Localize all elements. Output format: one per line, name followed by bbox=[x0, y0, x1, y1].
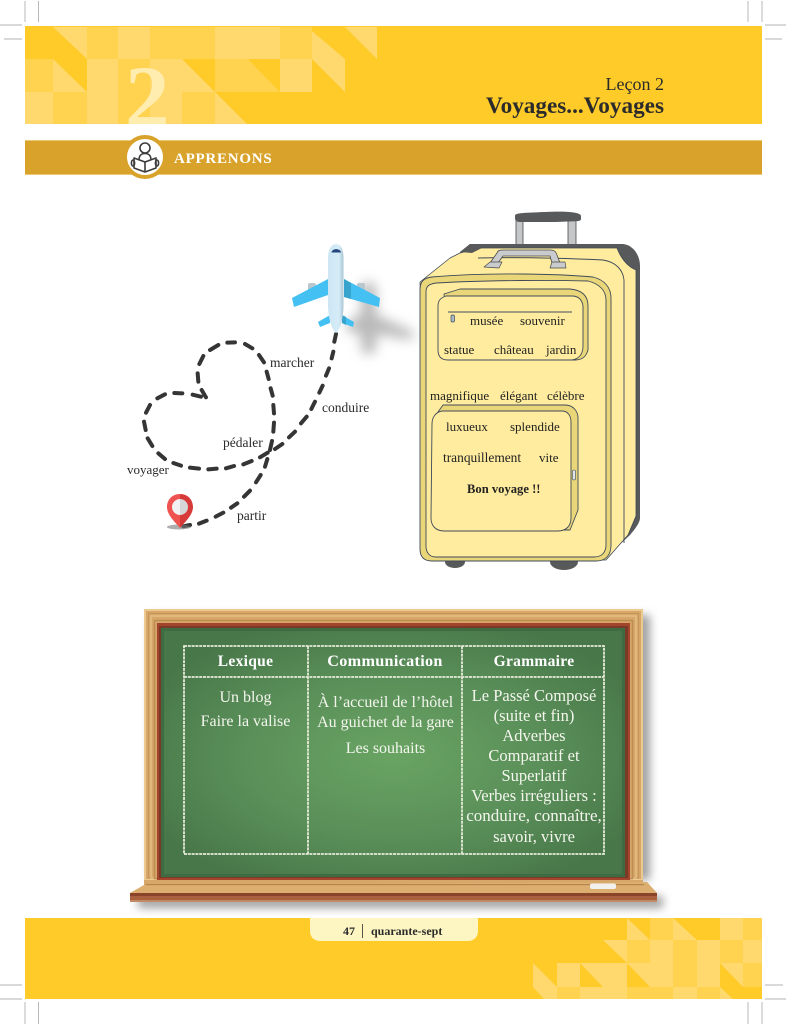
airplane shadow bbox=[347, 282, 414, 354]
suitcase upper pocket bbox=[438, 289, 588, 360]
suitcase words: élégant bbox=[500, 388, 538, 403]
grammaire column: conduire, connaître, bbox=[466, 806, 602, 825]
chalk table bbox=[184, 646, 604, 854]
red inner frame bbox=[157, 623, 630, 880]
wooden frame bbox=[144, 609, 643, 881]
icon: airplane bbox=[292, 244, 380, 333]
lexique column: Faire la valise bbox=[201, 713, 290, 730]
suitcase words: magnifique bbox=[430, 388, 489, 403]
communication column: Au guichet de la gare bbox=[317, 714, 454, 731]
suitcase words: célèbre bbox=[547, 388, 585, 403]
column headings: Lexique bbox=[218, 653, 273, 670]
suitcase words: statue bbox=[444, 342, 475, 357]
path verbs: marcher bbox=[270, 355, 315, 370]
grammaire column: Le Passé Composé bbox=[472, 686, 596, 705]
suitcase top corner cap bbox=[460, 244, 482, 253]
section title: APPRENONS bbox=[174, 151, 272, 167]
page number tab bbox=[310, 918, 478, 941]
grammaire column: Verbes irréguliers : bbox=[471, 786, 597, 805]
lexique column: Un blog bbox=[220, 689, 272, 706]
lesson title: Leçon 2 bbox=[606, 74, 664, 94]
suitcase words: vite bbox=[539, 450, 559, 465]
dashed travel path bbox=[144, 334, 336, 526]
green board surface bbox=[161, 628, 625, 877]
suitcase front panel bbox=[420, 274, 611, 561]
suitcase telescopic handle bbox=[515, 212, 581, 250]
path verbs: conduire bbox=[322, 400, 369, 415]
blackboard bbox=[130, 609, 663, 908]
grammaire column bbox=[466, 686, 602, 846]
suitcase back shell bbox=[440, 244, 640, 560]
path verbs bbox=[127, 355, 369, 523]
chalk tray bbox=[130, 880, 657, 902]
suitcase words: Bon voyage !! bbox=[467, 482, 540, 496]
path verbs: partir bbox=[237, 508, 267, 523]
suitcase words: luxueux bbox=[446, 419, 488, 434]
suitcase lower pocket bbox=[431, 405, 578, 531]
communication column: Les souhaits bbox=[346, 740, 425, 757]
suitcase carry handle bbox=[484, 250, 566, 268]
suitcase words: splendide bbox=[510, 419, 560, 434]
column headings: Communication bbox=[327, 652, 443, 670]
grammaire column: Superlatif bbox=[501, 766, 567, 785]
suitcase body bbox=[420, 248, 636, 560]
suitcase words bbox=[430, 313, 585, 496]
communication column: À l’accueil de l’hôtel bbox=[318, 692, 454, 711]
lexique column bbox=[201, 689, 290, 730]
path verbs: voyager bbox=[127, 462, 170, 477]
column headings: Grammaire bbox=[494, 653, 574, 670]
section bar: apprenons bbox=[25, 137, 762, 177]
header band bbox=[25, 26, 762, 147]
suitcase words: souvenir bbox=[520, 313, 565, 328]
suitcase words: tranquillement bbox=[443, 450, 521, 465]
grammaire column: Adverbes bbox=[502, 726, 566, 745]
path verbs: pédaler bbox=[223, 435, 263, 450]
chalk stick bbox=[590, 884, 616, 889]
footer geometric pattern bbox=[533, 918, 762, 999]
suitcase words: jardin bbox=[545, 342, 577, 357]
header geometric pattern bbox=[25, 27, 377, 124]
suitcase words: musée bbox=[470, 313, 503, 328]
page number tab: 47 bbox=[343, 924, 355, 938]
column headings bbox=[218, 652, 574, 670]
board shadow bbox=[138, 615, 663, 908]
grammaire column: (suite et fin) bbox=[494, 706, 574, 725]
suitcase bbox=[420, 212, 640, 570]
grammaire column: savoir, vivre bbox=[493, 827, 575, 846]
suitcase words: château bbox=[494, 342, 534, 357]
icon: person reading a book bbox=[125, 137, 165, 177]
footer band bbox=[25, 918, 762, 999]
icon: location pin bbox=[167, 494, 193, 530]
page number tab: quarante-sept bbox=[371, 924, 442, 938]
suitcase wheels bbox=[445, 554, 578, 570]
communication column bbox=[317, 692, 454, 757]
lesson title: Voyages...Voyages bbox=[486, 93, 664, 119]
lesson title bbox=[486, 74, 664, 119]
chapter number: 2 bbox=[125, 49, 170, 147]
grammaire column: Comparatif et bbox=[488, 746, 580, 765]
